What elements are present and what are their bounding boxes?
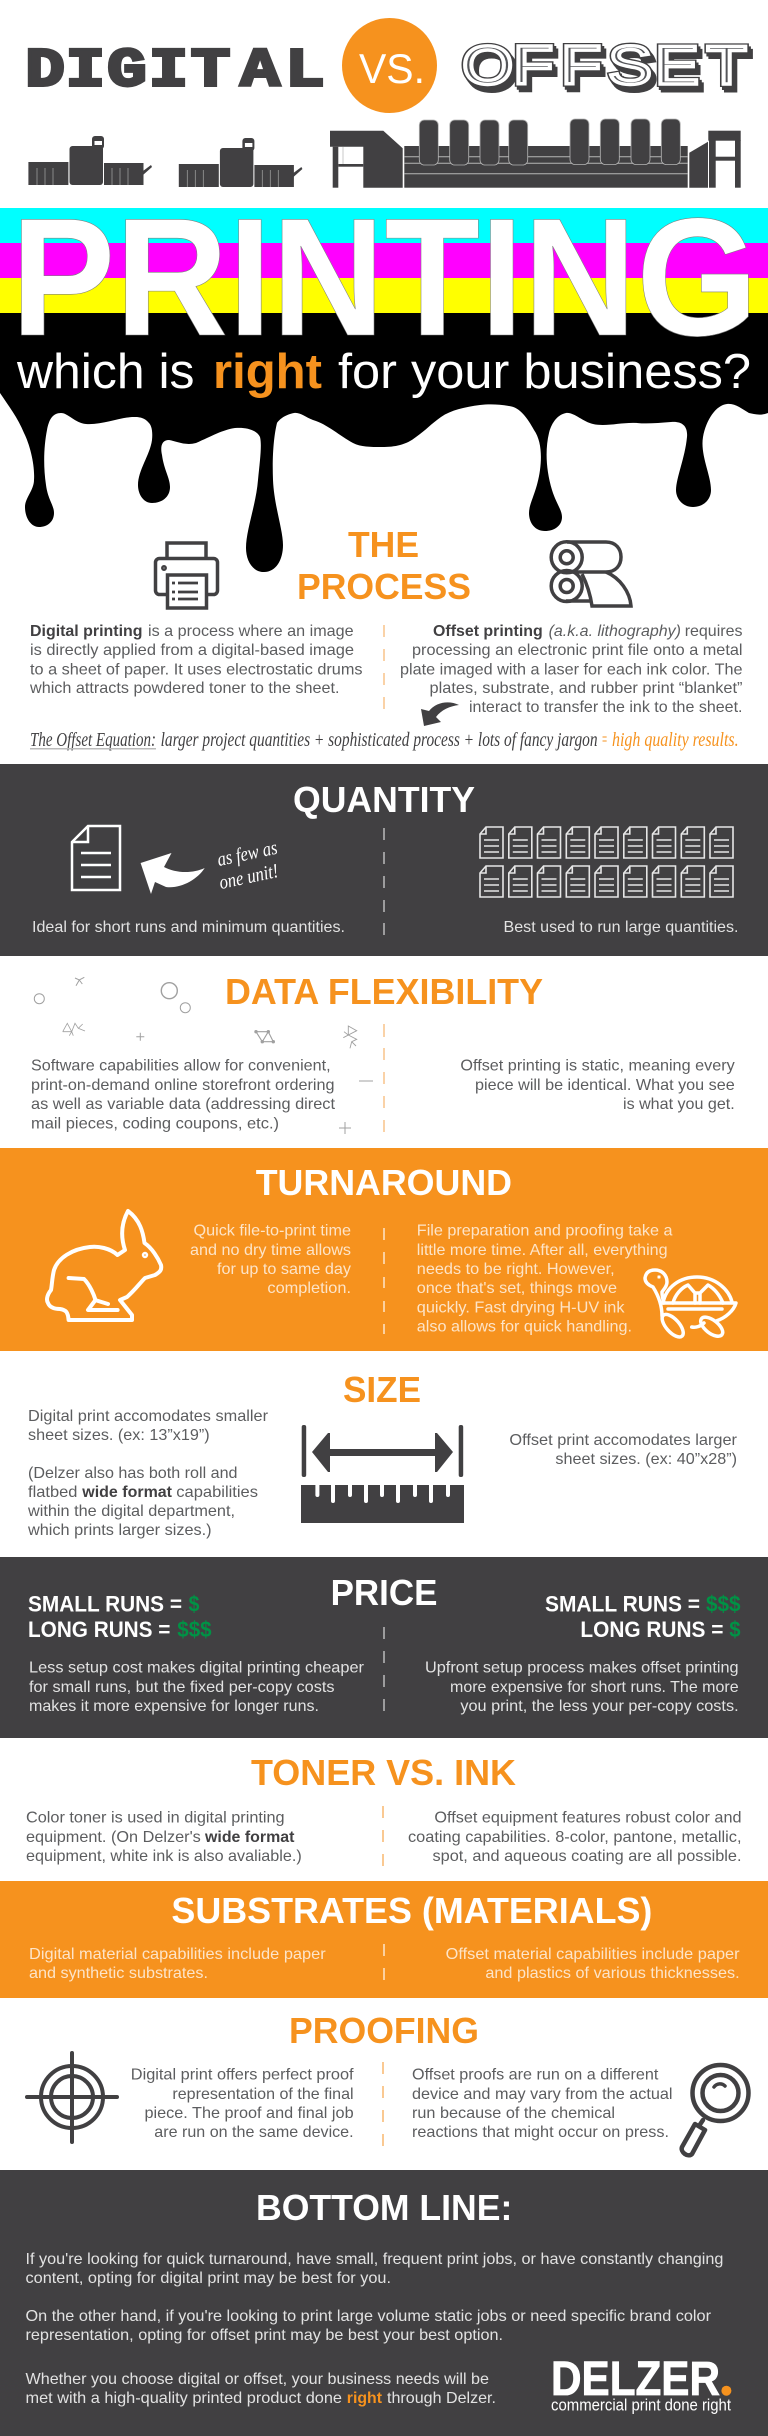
note: as few as one unit: one unit! bbox=[217, 860, 280, 894]
text: digital size: capabilities bbox=[176, 1484, 258, 1501]
text: digital size: flatbed bbox=[28, 1484, 77, 1501]
text: offset ink bbox=[408, 1810, 742, 1865]
text: digital data: print-on-demand online storefront ordering bbox=[31, 1077, 334, 1094]
icon: printer bbox=[156, 543, 218, 608]
text: digital advice: content, opting for digital print may be best for you. bbox=[26, 2270, 391, 2287]
digital price summary bbox=[28, 1592, 212, 1642]
text: closing: Whether you choose digital or offset, your business needs will be bbox=[26, 2371, 489, 2388]
text: closing: right bbox=[347, 2390, 383, 2407]
offset equation: larger project quantities + sophisticated process + lots of fancy jargon bbox=[161, 729, 598, 751]
icon: rabbit bbox=[47, 1211, 161, 1320]
title word: offset: OFFSET bbox=[462, 34, 747, 96]
note: as few as one unit bbox=[215, 837, 280, 894]
ink drips bbox=[0, 313, 768, 572]
text: offset printing bbox=[400, 623, 743, 716]
icon: paper rolls bbox=[551, 542, 631, 606]
text: offset turnaround: File preparation and proofing take a bbox=[417, 1223, 673, 1240]
text: digital printing: is a process where an image bbox=[148, 623, 354, 640]
digital price summary: SMALL RUNS = bbox=[28, 1592, 182, 1617]
text: digital quantity: Ideal for short runs and minimum quantities. bbox=[32, 919, 345, 936]
title word: digital: DIGITAL bbox=[25, 40, 325, 103]
title word: offset: OFFSET bbox=[462, 34, 747, 96]
text: offset price: more expensive for short runs. The more bbox=[450, 1679, 739, 1696]
digital price summary: LONG RUNS = bbox=[28, 1617, 170, 1642]
digital price summary: $$$ bbox=[177, 1617, 212, 1642]
icon: digital press 2 bbox=[179, 138, 302, 187]
text: offset printing: plates, substrate, and rubber print “blanket” bbox=[430, 680, 742, 697]
text: digital advice bbox=[26, 2251, 723, 2287]
text: digital size: sheet sizes. (ex: 13”x19”) bbox=[28, 1427, 210, 1444]
text: offset ink: coating capabilities. 8-color, pantone, metallic, bbox=[408, 1829, 742, 1846]
offset price summary: LONG RUNS = bbox=[580, 1617, 723, 1642]
text: offset printing: plate imaged with a laser for each ink color. The bbox=[400, 662, 743, 678]
panel: size bbox=[27, 1369, 738, 1539]
text: digital toner: equipment. (On Delzer's bbox=[26, 1829, 201, 1846]
text: digital advice: If you're looking for quick turnaround, have small, frequent print jobs, or have constantly changing bbox=[26, 2251, 723, 2268]
text: offset turnaround: also allows for quick handling. bbox=[417, 1318, 632, 1336]
text: offset ink: Offset equipment features robust color and bbox=[434, 1810, 742, 1827]
panel: proofing bbox=[27, 2010, 748, 2155]
text: digital substrates bbox=[29, 1946, 326, 1982]
note: as few as one unit: as few as bbox=[215, 837, 280, 871]
text: offset turnaround bbox=[417, 1223, 673, 1336]
text: offset substrates: and plastics of various thicknesses. bbox=[485, 1965, 740, 1982]
text: digital turnaround bbox=[190, 1223, 351, 1297]
text: digital toner bbox=[26, 1810, 302, 1865]
text: digital toner: equipment, white ink is also avaliable.) bbox=[26, 1848, 302, 1865]
text: digital data: as well as variable data (addressing direct bbox=[31, 1096, 336, 1113]
text: digital price: Less setup cost makes digital printing cheaper bbox=[29, 1660, 365, 1677]
subheadline: right bbox=[213, 345, 322, 399]
text: offset proofing: run because of the chemical bbox=[412, 2105, 615, 2122]
text: digital price bbox=[29, 1660, 365, 1715]
text: digital printing: which attracts powdered toner to the sheet. bbox=[29, 680, 340, 697]
text: digital substrates: Digital material capabilities include paper bbox=[29, 1946, 326, 1963]
badge: vs: VS. bbox=[359, 45, 425, 92]
text: digital data bbox=[31, 1058, 336, 1133]
text: digital toner: Color toner is used in digital printing bbox=[26, 1810, 285, 1827]
heading: bottom line: BOTTOM LINE: bbox=[256, 2187, 512, 2228]
heading: proofing: PROOFING bbox=[289, 2010, 479, 2051]
subheadline: which is bbox=[16, 345, 194, 399]
heading: price: PRICE bbox=[331, 1572, 437, 1613]
offset price summary bbox=[545, 1592, 741, 1642]
text: digital size: (Delzer also has both roll and bbox=[28, 1465, 238, 1482]
text: digital printing: Digital printing bbox=[30, 623, 142, 640]
text: offset proofing bbox=[412, 2067, 672, 2141]
text: digital size bbox=[27, 1408, 269, 1539]
text: digital turnaround: completion. bbox=[267, 1280, 351, 1297]
text: offset advice bbox=[26, 2308, 712, 2344]
text: offset printing: requires bbox=[685, 623, 742, 640]
text: offset printing: interact to transfer the ink to the sheet. bbox=[469, 699, 742, 716]
banner: cmyk printing bbox=[0, 183, 768, 572]
text: digital proofing: representation of the final bbox=[172, 2086, 354, 2103]
heading: size: SIZE bbox=[343, 1369, 421, 1410]
panel: data flexibility bbox=[31, 971, 735, 1134]
subheadline bbox=[16, 345, 751, 399]
heading: toner vs ink: TONER VS. INK bbox=[251, 1752, 516, 1793]
text: offset advice: representation, opting for offset print may be best your best option. bbox=[26, 2327, 503, 2344]
arrow: to single document bbox=[141, 853, 205, 894]
text: closing bbox=[26, 2371, 496, 2407]
decoration: data specks bbox=[34, 977, 373, 1134]
panel: toner vs ink bbox=[26, 1752, 742, 1866]
text: digital proofing: Digital print offers perfect proof bbox=[131, 2067, 354, 2084]
panel: quantity bbox=[0, 764, 768, 956]
text: offset size: sheet sizes. (ex: 40”x28”) bbox=[555, 1451, 737, 1468]
panel: substrates bbox=[0, 1881, 768, 1998]
text: digital printing: is directly applied from a digital-based image bbox=[30, 642, 354, 659]
text: digital data: mail pieces, coding coupons, etc.) bbox=[31, 1116, 279, 1133]
panel: bottom line bbox=[0, 2170, 768, 2436]
icon: single document bbox=[72, 826, 120, 890]
icon: ruler bbox=[301, 1484, 464, 1523]
text: offset proofing: Offset proofs are run on a different bbox=[412, 2067, 659, 2084]
header: digital vs offset bbox=[25, 18, 751, 188]
text: offset data: is what you get. bbox=[623, 1096, 735, 1113]
text: offset printing: (a.k.a. lithography) bbox=[549, 623, 681, 640]
text: offset printing: Offset printing bbox=[433, 623, 543, 640]
text: digital toner: wide format bbox=[204, 1829, 295, 1846]
title word: offset: OFFSET bbox=[466, 40, 751, 101]
text: offset data: piece will be identical. What you see bbox=[475, 1077, 735, 1094]
heading: turnaround: TURNAROUND bbox=[256, 1162, 512, 1203]
text: offset proofing: device and may vary from the actual bbox=[412, 2086, 672, 2103]
text: offset data: Offset printing is static, meaning every bbox=[460, 1058, 735, 1075]
icon: width arrow bbox=[302, 1425, 463, 1477]
heading: the process bbox=[297, 524, 471, 607]
text: digital size: which prints larger sizes.) bbox=[27, 1522, 212, 1539]
text: offset turnaround: needs to be right. However, bbox=[417, 1261, 615, 1278]
text: offset advice: On the other hand, if you're looking to print large volume static jobs or need specific brand color bbox=[26, 2308, 712, 2325]
text: offset price: Upfront setup process makes offset printing bbox=[425, 1660, 739, 1677]
text: digital size: within the digital department, bbox=[27, 1503, 235, 1520]
heading: data flexibility: DATA FLEXIBILITY bbox=[225, 971, 543, 1012]
panel: turnaround bbox=[0, 1148, 768, 1351]
text: offset turnaround: quickly. Fast drying H-UV ink bbox=[417, 1300, 626, 1316]
text: offset data bbox=[460, 1058, 735, 1113]
text: digital data: Software capabilities allow for convenient, bbox=[31, 1058, 331, 1075]
text: digital proofing: are run on the same device. bbox=[154, 2124, 354, 2141]
subheadline: for your business? bbox=[338, 345, 751, 399]
text: offset price: you print, the less your per-copy costs. bbox=[460, 1698, 739, 1715]
panel: the process bbox=[29, 524, 743, 751]
text: digital size: Digital print accomodates smaller bbox=[28, 1408, 269, 1425]
heading: quantity: QUANTITY bbox=[293, 779, 475, 820]
digital price summary: $ bbox=[189, 1592, 199, 1617]
logo: delzer: commercial print done right bbox=[551, 2396, 731, 2415]
text: digital turnaround: Quick file-to-print time bbox=[194, 1223, 351, 1240]
icon: registration target bbox=[27, 2053, 117, 2142]
arrow: to equation bbox=[421, 702, 459, 726]
text: closing: met with a high-quality printed product done bbox=[26, 2390, 342, 2407]
text: offset turnaround: little more time. After all, everything bbox=[417, 1242, 668, 1259]
text: digital printing: to a sheet of paper. It uses electrostatic drums bbox=[30, 662, 362, 678]
text: offset size: Offset print accomodates larger bbox=[509, 1432, 738, 1449]
heading: substrates: SUBSTRATES (MATERIALS) bbox=[171, 1890, 652, 1931]
text: offset substrates: Offset material capabilities include paper bbox=[446, 1946, 740, 1963]
offset price summary: $$$ bbox=[706, 1592, 741, 1617]
offset equation: The Offset Equation: bbox=[30, 729, 156, 751]
icon: magnifier bbox=[682, 2065, 748, 2155]
text: digital price: makes it more expensive for longer runs. bbox=[29, 1698, 319, 1715]
text: offset ink: spot, and aqueous coating are all possible. bbox=[432, 1848, 742, 1865]
badge: vs bbox=[342, 18, 437, 113]
offset price summary: SMALL RUNS = bbox=[545, 1592, 700, 1617]
text: digital substrates: and synthetic substrates. bbox=[29, 1965, 208, 1982]
text: digital turnaround: and no dry time allows bbox=[190, 1242, 351, 1259]
heading: the process: THE bbox=[348, 524, 419, 565]
icons: many documents bbox=[480, 827, 733, 897]
panel: price bbox=[0, 1557, 768, 1738]
text: offset quantity: Best used to run large quantities. bbox=[504, 919, 738, 936]
icon: turtle bbox=[645, 1270, 736, 1340]
text: offset size bbox=[509, 1432, 738, 1468]
text: digital proofing bbox=[131, 2067, 354, 2141]
offset equation: high quality results. bbox=[612, 729, 739, 751]
logo: delzer: DELZER bbox=[551, 2353, 720, 2406]
offset equation: = bbox=[602, 729, 608, 751]
title word: offset: OFFSET bbox=[464, 37, 749, 99]
text: digital proofing: piece. The proof and final job bbox=[144, 2105, 354, 2122]
offset price summary: $ bbox=[729, 1617, 741, 1642]
icon: offset press bbox=[330, 119, 741, 188]
text: digital size: wide format bbox=[81, 1484, 173, 1501]
text: digital turnaround: for up to same day bbox=[217, 1261, 351, 1278]
text: closing: through Delzer. bbox=[387, 2390, 496, 2407]
text: offset printing: processing an electronic print file onto a metal bbox=[412, 642, 742, 659]
text: offset turnaround: once that's set, things move bbox=[417, 1280, 617, 1297]
text: digital printing bbox=[29, 623, 363, 697]
heading: the process: PROCESS bbox=[297, 566, 471, 607]
text: offset price bbox=[425, 1660, 739, 1715]
icon: digital press 1 bbox=[28, 136, 152, 185]
text: offset proofing: reactions that might occur on press. bbox=[412, 2124, 669, 2141]
text: digital price: for small runs, but the fixed per-copy costs bbox=[29, 1679, 334, 1696]
text: offset substrates bbox=[446, 1946, 740, 1982]
